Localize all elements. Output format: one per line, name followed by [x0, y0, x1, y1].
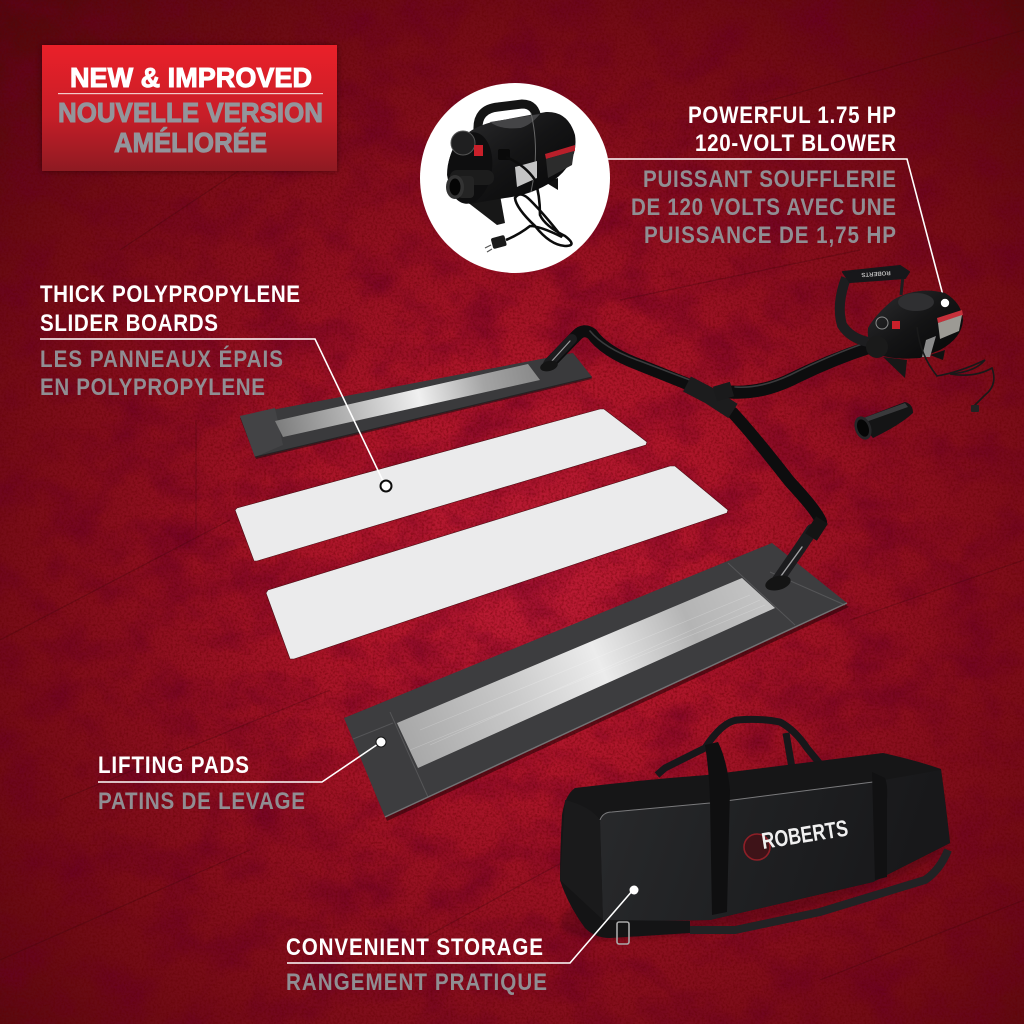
lifting pad: large — [344, 543, 849, 821]
shoulder strap — [690, 850, 948, 930]
strap — [840, 278, 868, 342]
text block: blower French: DE 120 VOLTS AVEC UNE — [631, 193, 896, 220]
blower assembled — [840, 266, 994, 412]
leader line: slider boards — [40, 339, 383, 481]
leader line: storage — [287, 890, 633, 963]
slider board: upper — [235, 409, 647, 561]
hose assembly — [548, 331, 870, 580]
front panel — [600, 770, 950, 922]
text block: lifting pads French: PATINS DE LEVAGE — [98, 787, 305, 814]
text block: blower French: PUISSANCE DE 1,75 HP — [644, 221, 896, 248]
hose adapter — [851, 402, 913, 442]
blower photo circle — [420, 83, 610, 273]
buckle — [617, 922, 629, 944]
text block: blower French — [631, 165, 896, 248]
heading: slider boards English: SLIDER BOARDS — [40, 309, 218, 336]
bag logo text: ROBERTS — [760, 815, 850, 854]
heading: blower English — [688, 101, 896, 156]
strap logo: ROBERTS — [861, 269, 891, 277]
heading: blower English: 120-VOLT BLOWER — [695, 129, 896, 156]
leader line: blower — [605, 159, 945, 303]
text block: slider boards French — [40, 345, 283, 400]
metal plate — [275, 364, 540, 437]
icon: blower front view — [443, 104, 576, 252]
lifting pad: small — [240, 353, 592, 459]
front straps — [705, 742, 730, 915]
handles — [657, 719, 825, 775]
heading: slider boards English — [40, 280, 300, 336]
slider board: lower — [266, 466, 728, 659]
bag body — [560, 753, 950, 922]
badge French line 2: AMÉLIORÉE — [114, 127, 267, 158]
marker: lifting pads — [376, 737, 386, 747]
heading: slider boards English: THICK POLYPROPYLENE — [40, 280, 300, 307]
badge: new and improved — [42, 45, 337, 171]
text block: slider boards French: LES PANNEAUX ÉPAIS — [40, 345, 283, 372]
text block: blower French: PUISSANT SOUFFLERIE — [643, 165, 896, 192]
text block: slider boards French: EN POLYPROPYLENE — [40, 373, 265, 400]
marker: blower — [940, 298, 950, 308]
badge heading: NEW & IMPROVED — [70, 62, 312, 93]
heading: lifting pads English: LIFTING PADS — [98, 751, 249, 778]
marker: slider board — [380, 480, 392, 492]
bag logo — [744, 834, 770, 860]
heading: blower English: POWERFUL 1.75 HP — [688, 101, 896, 128]
marker: storage — [630, 886, 638, 894]
metal plate — [397, 578, 775, 768]
text block: storage French: RANGEMENT PRATIQUE — [286, 968, 547, 995]
heading: storage English: CONVENIENT STORAGE — [286, 933, 543, 960]
storage bag — [551, 719, 959, 964]
leader line: lifting pads — [98, 742, 381, 782]
badge French line 1: NOUVELLE VERSION — [58, 97, 323, 128]
pad connector flanges — [539, 359, 792, 593]
power cord — [917, 327, 994, 407]
